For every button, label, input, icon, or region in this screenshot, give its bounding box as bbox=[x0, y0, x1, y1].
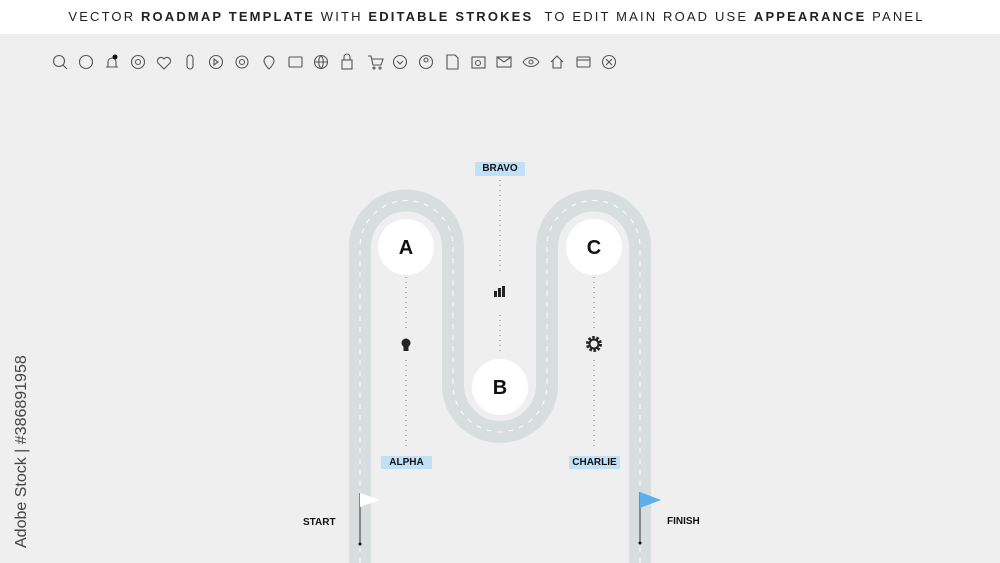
icon: gear bbox=[588, 338, 600, 350]
milestone circles bbox=[378, 219, 622, 415]
label: alpha bbox=[381, 456, 432, 469]
side text: Adobe Stock | #386891958 bbox=[13, 355, 30, 548]
label: finish: FINISH bbox=[667, 516, 700, 527]
header band bbox=[0, 0, 1000, 34]
icon: chart bbox=[494, 286, 505, 297]
flags bbox=[358, 493, 380, 546]
label: start: START bbox=[303, 517, 336, 528]
road: B bbox=[493, 377, 507, 399]
icon: bulb bbox=[402, 338, 410, 351]
label: alpha: ALPHA bbox=[389, 457, 424, 468]
road: A bbox=[399, 237, 413, 259]
label: bravo: BRAVO bbox=[482, 163, 518, 174]
label: charlie: CHARLIE bbox=[572, 457, 617, 468]
road: C bbox=[587, 237, 601, 259]
title: VECTOR ROADMAP TEMPLATE WITH EDITABLE STROKES TO EDIT MAIN ROAD USE APPEARANCE PANEL bbox=[68, 9, 925, 24]
connector lines bbox=[406, 180, 594, 448]
